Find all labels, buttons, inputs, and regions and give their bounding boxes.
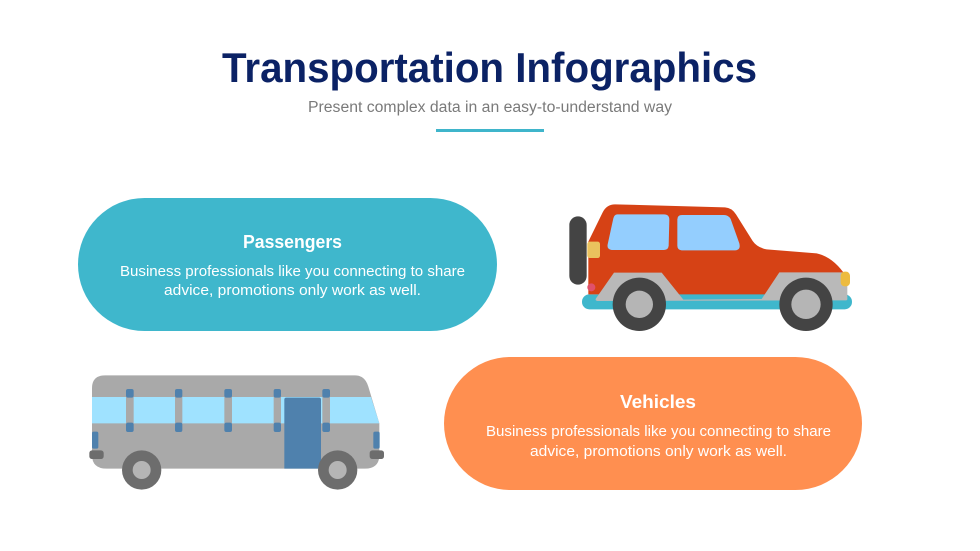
title underline accent bbox=[436, 129, 544, 132]
passengers heading: Passengers bbox=[243, 232, 342, 252]
vehicles body text: Business professionals like you connecting to share bbox=[486, 423, 831, 440]
vehicles body text: advice, promotions only work as well. bbox=[530, 443, 787, 460]
panel: passengers bbox=[78, 198, 497, 331]
passengers body text: Business professionals like you connecting to share bbox=[120, 263, 465, 280]
icon: grey bus bbox=[89, 375, 384, 490]
passengers body text: advice, promotions only work as well. bbox=[164, 282, 421, 299]
vehicles body text bbox=[486, 423, 831, 460]
title: Transportation Infographics bbox=[222, 44, 757, 91]
subtitle: Present complex data in an easy-to-understand way bbox=[308, 99, 672, 116]
icon: red jeep bbox=[569, 204, 852, 331]
panel: vehicles bbox=[444, 357, 862, 490]
vehicles heading: Vehicles bbox=[620, 392, 696, 412]
passengers body text bbox=[120, 263, 465, 299]
